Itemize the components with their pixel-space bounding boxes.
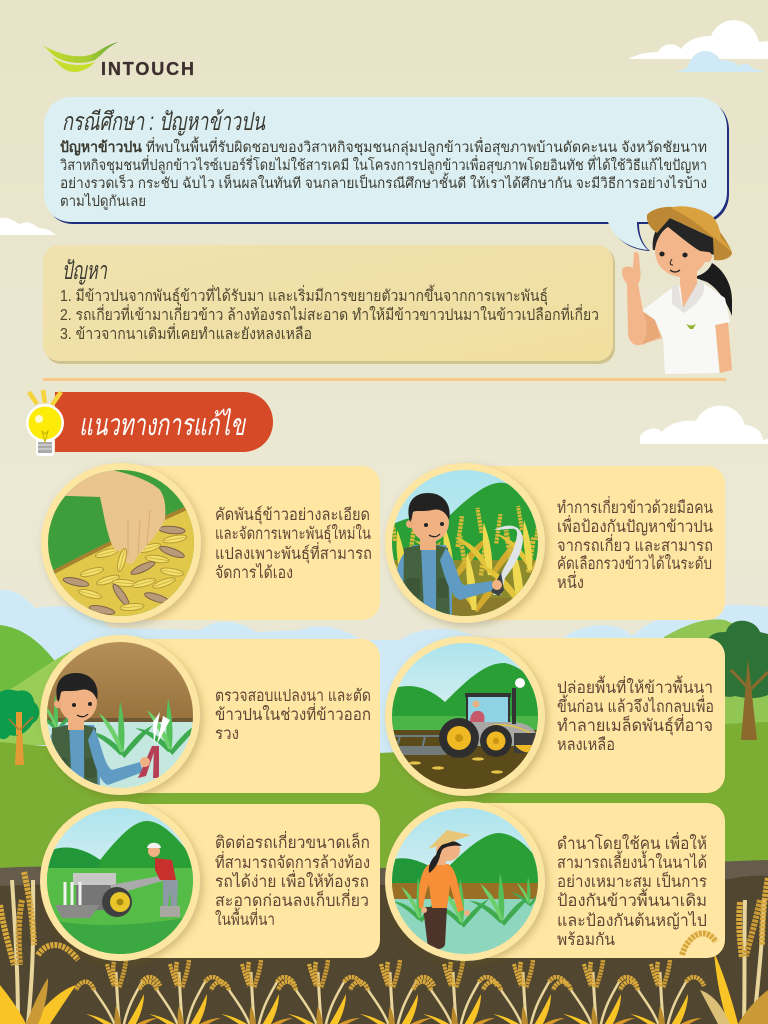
card text: จัดการได้เอง [215, 563, 293, 582]
illustration: hand picking seeds [48, 470, 194, 616]
hat brim [647, 207, 732, 260]
card text: รวง [215, 725, 239, 743]
card text: ปล่อยพื้นที่ให้ข้าวพื้นนา [557, 675, 713, 697]
illustration: woman planting rice [392, 808, 538, 954]
card text [215, 831, 370, 929]
card background [120, 639, 380, 793]
card text: ในพื้นที่นา [215, 907, 275, 929]
case study paragraph: วิสาหกิจชุมชนที่ปลูกข้าวไรซ์เบอร์รี่โดยไม่ใช้สารเคมี ในโครงการปลูกข้าวเพื่อสุขภาพโดยอินทัช ที่ได้ใช้วิธีแก้ไขปัญหา [60, 155, 707, 174]
tree: right [702, 621, 768, 740]
hair [653, 218, 715, 255]
case study paragraph: ปัญหาข้าวปน ที่พบในพื้นที่รับผิดชอบของวิสาหกิจชุมชนกลุ่มปลูกข้าวเพื่อสุขภาพบ้านดัดคะนน จังหวัดชัยนาท [60, 136, 707, 156]
arm right [715, 322, 732, 373]
card text: ที่สามารถจัดการล้างท้อง [215, 851, 370, 872]
card text: สะอาดก่อนลงเก็บเกี่ยว [215, 889, 369, 910]
circle frame [40, 635, 200, 795]
illustration: walking tractor [47, 808, 193, 954]
rice plant: large left [0, 872, 78, 1024]
card background [120, 466, 380, 620]
card background [120, 804, 380, 958]
card text [557, 832, 707, 949]
bubble body [44, 97, 727, 250]
circle frame [385, 801, 545, 961]
speech bubble: case study [44, 97, 729, 251]
card text: ตรวจสอบแปลงนา และตัด [215, 687, 371, 705]
background: green ground [0, 722, 768, 900]
upper arm shade [642, 312, 660, 345]
card text: ขึ้นก่อน แล้วจึงไถกลบเพื่อ [557, 694, 714, 716]
panel: problems [43, 245, 615, 364]
card text: และจัดการเพาะพันธุ์ใหม่ใน [215, 524, 371, 544]
card text: อย่างเหมาะสม เป็นการ [557, 871, 707, 891]
card text: ทำการเกี่ยวข้าวด้วยมือคน [557, 496, 713, 517]
case study paragraph: อย่างรวดเร็ว กระชับ ฉับไว เห็นผลในทันที จนกลายเป็นกรณีศึกษาชั้นดี ให้เราได้ศึกษากัน จะมีวิธีการอย่างไรบ้าง [60, 172, 707, 192]
rice plants: bottom row [76, 960, 704, 1024]
background: soil [0, 860, 768, 1024]
card text: เพื่อป้องกันปัญหาข้าวปน [557, 515, 713, 536]
case study paragraph [60, 136, 707, 210]
circle frame [41, 463, 201, 623]
heading banner: solutions [26, 390, 273, 456]
circle frame [385, 636, 545, 796]
background: far green hills [0, 619, 768, 760]
card 2: harvest by hand [367, 463, 725, 625]
background: blue cloud band [0, 590, 768, 900]
card text [215, 687, 371, 743]
card text: จากรถเกี่ยว และสามารถ [557, 534, 713, 555]
card text: ติดต่อรถเกี่ยวขนาดเล็ก [215, 831, 370, 852]
illustration: farmer with sickle [392, 470, 538, 616]
card 4: flood and plough [385, 636, 725, 796]
rice plant: large right [700, 878, 768, 1024]
raised hand [622, 252, 641, 284]
card 6: transplanting by hand [385, 800, 725, 964]
banner text: แนวทางการแก้ไข [79, 408, 246, 442]
nose [670, 259, 673, 265]
neck [680, 272, 697, 308]
card text: ข้าวปนในช่วงที่ข้าวออก [215, 703, 371, 724]
ponytail [693, 263, 732, 316]
card text: คัดเลือกรวงข้าวได้ในระดับ [557, 554, 712, 573]
panel body [43, 245, 613, 361]
circle frame [40, 801, 200, 961]
bubble shadow [46, 99, 729, 251]
card text [557, 675, 714, 754]
smile [670, 270, 680, 272]
card text: พร้อมกัน [557, 931, 615, 949]
card 5: small harvester [40, 800, 380, 961]
case study paragraph: ตามไปดูกันเลย [60, 192, 146, 210]
banner pill [55, 392, 273, 452]
collar [672, 280, 704, 313]
circle frame [385, 463, 545, 623]
card text: ทำลายเมล็ดพันธุ์ที่อาจ [557, 714, 713, 736]
cloud: left of bubble [0, 218, 56, 235]
character: woman in straw hat pointing up [622, 206, 732, 374]
card text: รถได้ง่าย เพื่อให้ท้องรถ [215, 870, 369, 891]
shirt [643, 283, 730, 374]
logo swoosh [42, 42, 119, 72]
problems list: 1. มีข้าวปนจากพันธุ์ข้าวที่ได้รับมา และเริ่มมีการขยายตัวมากขึ้นจากการเพาะพันธุ์ [60, 284, 548, 306]
card text: แปลงเพาะพันธุ์ที่สามารถ [215, 542, 372, 564]
panel shadow [45, 247, 615, 364]
card background [465, 638, 725, 793]
shirt logo [686, 324, 696, 329]
card text: ป้องกันข้าวพื้นนาเดิม [557, 888, 707, 910]
hat crown [671, 206, 731, 252]
illustration: farmer with shears in paddy [47, 642, 193, 788]
logo [42, 42, 194, 79]
eyes [659, 252, 688, 257]
cloud: right middle [640, 406, 768, 444]
problems list: 2. รถเกี่ยวที่เข้ามาเกี่ยวข้าว ล้างท้องรถไม่สะอาด ทำให้มีข้าวขาวปนมาในข้าวเปลือกที่เกี่ยว [60, 304, 599, 324]
card text [557, 496, 713, 592]
card text: หลงเหลือ [557, 736, 615, 754]
card text: สามารถเลี้ยงน้ำในนาได้ [557, 850, 707, 872]
card 3: inspect the paddy [33, 635, 380, 802]
problems list: 3. ข้าวจากนาเดิมที่เคยทำและยังหลงเหลือ [60, 323, 312, 343]
card 1: select seed [40, 460, 380, 630]
heading: problems: ปัญหา [62, 257, 108, 285]
tree: left [0, 690, 39, 765]
card background [465, 803, 725, 958]
raised arm [627, 283, 662, 345]
illustration: tractor ploughing [392, 643, 538, 789]
heading: case study: กรณีศึกษา : ปัญหาข้าวปน [62, 108, 266, 136]
card text: หนึ่ง [557, 571, 584, 592]
card text: คัดพันธุ์ข้าวอย่างละเอียด [215, 505, 370, 525]
card background [465, 466, 725, 620]
problems list [60, 284, 599, 343]
icon: light bulb [26, 390, 64, 456]
face [655, 227, 712, 277]
cloud: top right [628, 20, 768, 59]
cloud: small blue top right [672, 51, 765, 72]
card text: และป้องกันต้นหญ้าไป [557, 911, 707, 930]
card text [215, 505, 372, 582]
divider line [43, 378, 726, 381]
rice ear overlapping card 6 [682, 933, 716, 955]
logo wordmark: INTOUCH [101, 59, 194, 79]
card text: ดำนาโดยใช้คน เพื่อให้ [557, 832, 707, 853]
